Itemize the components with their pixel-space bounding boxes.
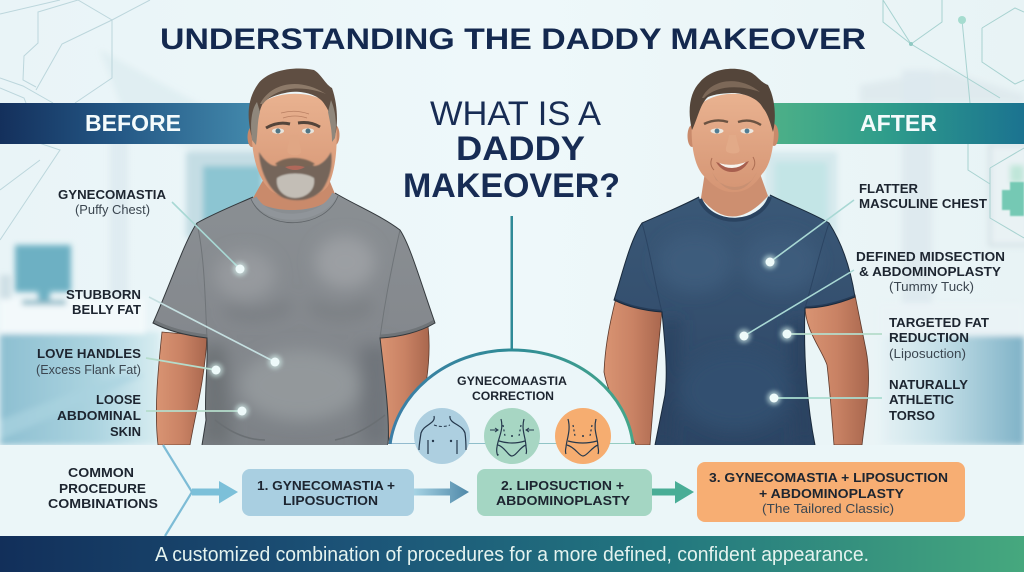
before banner xyxy=(0,103,252,144)
left arm xyxy=(604,298,662,445)
callout: defined midsection xyxy=(737,249,1005,343)
step 2 box: ABDOMINOPLASTY xyxy=(496,493,630,508)
callout: stubborn belly fat xyxy=(66,287,282,369)
callout: stubborn belly fat: STUBBORN xyxy=(66,287,141,302)
navy t-shirt xyxy=(614,195,855,445)
step 1 box xyxy=(242,469,414,516)
step 3 box: + ABDOMINOPLASTY xyxy=(759,486,904,501)
callouts: after xyxy=(737,181,1005,423)
neck xyxy=(701,168,768,217)
footer banner xyxy=(0,536,1024,572)
gray t-shirt xyxy=(153,193,435,445)
dome panel: gynecomastia correction xyxy=(388,350,635,464)
connector line xyxy=(510,216,513,351)
dome label xyxy=(457,374,567,403)
callout: love handles xyxy=(36,346,223,377)
before banner: BEFORE xyxy=(85,110,181,136)
callout: gynecomastia xyxy=(58,187,247,276)
icon: chest xyxy=(414,408,470,464)
callout: targeted fat reduction: REDUCTION xyxy=(889,330,969,345)
callout: gynecomastia: GYNECOMASTIA xyxy=(58,187,167,202)
callout: love handles: (Excess Flank Fat) xyxy=(36,362,141,377)
neck xyxy=(253,172,335,216)
left arm xyxy=(156,332,207,445)
dome label: GYNECOMAASTIA xyxy=(457,374,567,388)
footer banner: A customized combination of procedures for a more defined, confident appearance. xyxy=(155,544,869,566)
head: worried face xyxy=(248,69,340,200)
figure: before man xyxy=(153,69,435,445)
callout: targeted fat reduction xyxy=(780,315,989,361)
callout: naturally athletic torso: ATHLETIC xyxy=(889,392,955,407)
label: common procedure combinations: COMBINATIONS xyxy=(48,496,158,511)
callout: stubborn belly fat: BELLY FAT xyxy=(72,302,141,317)
step 2 box: 2. LIPOSUCTION + xyxy=(501,478,624,493)
icon: abdomen xyxy=(555,408,611,464)
label: common procedure combinations: COMMON xyxy=(68,465,134,480)
arrow: bracket into step 1 xyxy=(163,445,238,536)
bottom band xyxy=(0,445,1024,536)
callout: loose abdominal skin: SKIN xyxy=(110,424,141,439)
callout: naturally athletic torso: NATURALLY xyxy=(889,377,968,392)
step 3 box: (The Tailored Classic) xyxy=(762,501,894,516)
callout: loose abdominal skin xyxy=(57,392,249,439)
title: UNDERSTANDING THE DADDY MAKEOVER xyxy=(160,23,866,56)
step 1 box: LIPOSUCTION xyxy=(283,493,378,508)
step 3 box xyxy=(697,462,965,522)
callout: naturally athletic torso: TORSO xyxy=(889,408,935,423)
callout: targeted fat reduction: TARGETED FAT xyxy=(889,315,989,330)
callout: gynecomastia: (Puffy Chest) xyxy=(75,202,150,217)
background: clinic room xyxy=(0,0,1024,445)
right arm xyxy=(805,295,869,445)
callout: defined midsection: (Tummy Tuck) xyxy=(889,279,974,294)
heading: what is a daddy makeover: DADDY xyxy=(456,130,585,168)
callout: loose abdominal skin: LOOSE xyxy=(96,392,141,407)
arrow: step 1 to step 2 xyxy=(414,481,469,504)
callout: flatter masculine chest: FLATTER xyxy=(859,181,919,196)
after banner xyxy=(772,103,1024,144)
label: common procedure combinations: PROCEDURE xyxy=(59,481,146,496)
figure: after man xyxy=(604,69,869,445)
heading: what is a daddy makeover xyxy=(403,95,620,205)
callout: loose abdominal skin: ABDOMINAL xyxy=(57,408,141,423)
head: smiling face xyxy=(688,69,778,192)
after banner: AFTER xyxy=(860,110,937,136)
arrow: step 2 to step 3 xyxy=(652,481,694,504)
callout: naturally athletic torso xyxy=(767,377,968,423)
step 3 box: 3. GYNECOMASTIA + LIPOSUCTION xyxy=(709,470,948,485)
callout: defined midsection: DEFINED MIDSECTION xyxy=(856,249,1005,264)
callout: flatter masculine chest xyxy=(763,181,987,269)
step 2 box xyxy=(477,469,652,516)
callout: flatter masculine chest: MASCULINE CHEST xyxy=(859,196,987,211)
callout: targeted fat reduction: (Liposuction) xyxy=(889,346,966,361)
heading: what is a daddy makeover: MAKEOVER? xyxy=(403,167,620,205)
dome label: CORRECTION xyxy=(472,389,554,403)
step 1 box: 1. GYNECOMASTIA + xyxy=(257,478,395,493)
callouts: before xyxy=(36,187,282,439)
right arm xyxy=(380,326,429,445)
icon: waist with arrows xyxy=(484,408,540,464)
label: common procedure combinations xyxy=(48,465,158,511)
callout: defined midsection: & ABDOMINOPLASTY xyxy=(859,264,1001,279)
callout: love handles: LOVE HANDLES xyxy=(37,346,141,361)
heading: what is a daddy makeover: WHAT IS A xyxy=(430,95,601,133)
